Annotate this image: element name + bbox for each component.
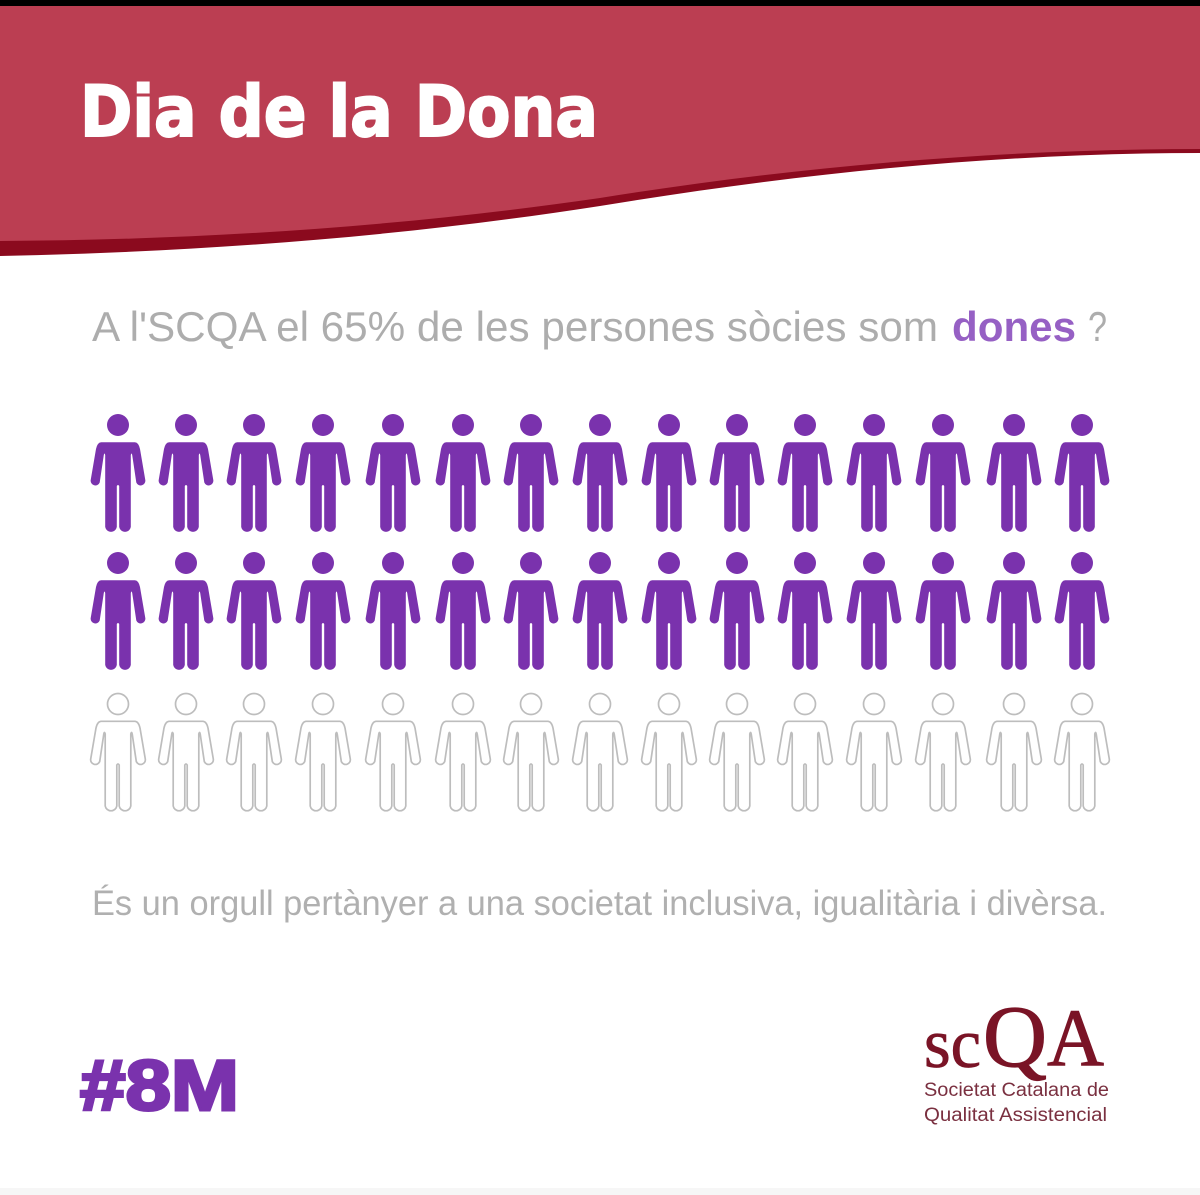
question heading: ? [1088, 303, 1107, 350]
bottom edge strip [0, 1188, 1200, 1195]
title: Dia de la Dona [80, 71, 598, 153]
logo: SCQA: A [1047, 992, 1104, 1083]
logo: SCQA: Societat Catalana de [924, 1080, 1109, 1101]
logo: SCQA: Qualitat Assistencial [924, 1105, 1107, 1126]
header banner [0, 0, 1200, 256]
pictogram row 1: filled people [91, 414, 1109, 532]
closing statement: És un orgull pertànyer a una societat inclusiva, igualitària i divèrsa. [92, 884, 1107, 923]
logo: SCQA: Q [983, 989, 1047, 1086]
pictogram row 3: outlined people [91, 694, 1109, 811]
pictogram row 2: filled people [91, 552, 1109, 670]
question heading: dones [952, 303, 1076, 350]
logo: SCQA [924, 989, 1109, 1126]
hashtag: #8M [80, 1047, 239, 1126]
logo: SCQA: sc [924, 1006, 981, 1083]
question heading: A l'SCQA el 65% de les persones sòcies som [92, 303, 938, 350]
